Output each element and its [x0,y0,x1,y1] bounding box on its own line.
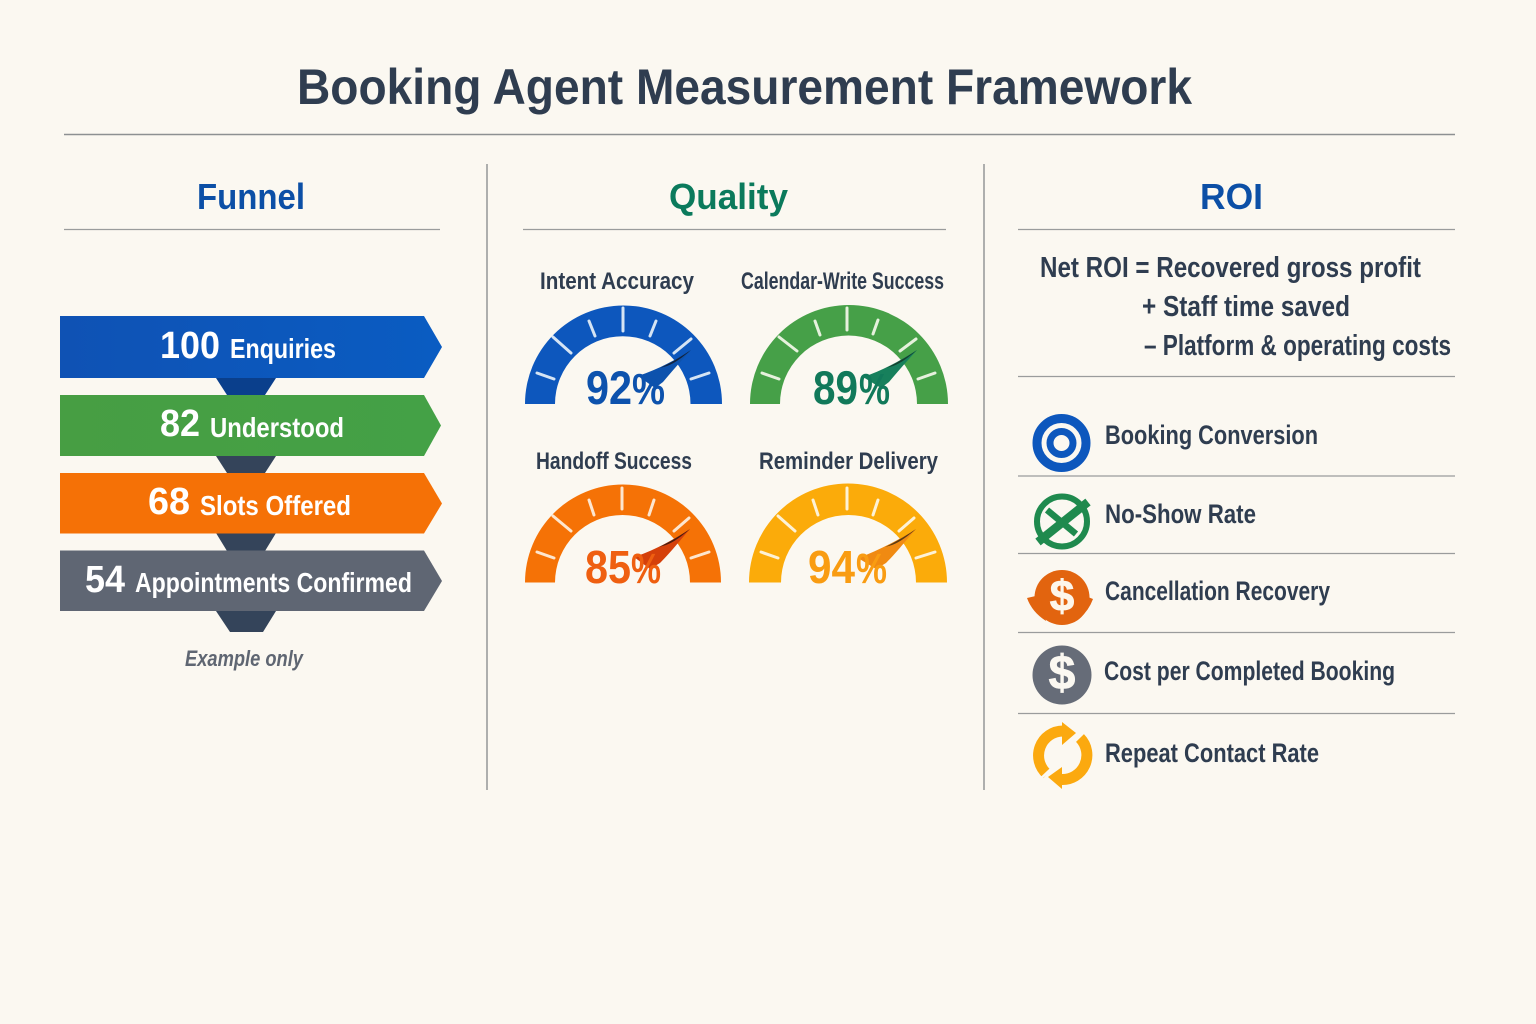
funnel bar: 100 enquiries [60,316,442,378]
connector: understood to slots [216,456,276,473]
gauge: reminder delivery: 94 [808,541,855,593]
gauge: calendar-write success: % [859,365,890,414]
panel: funnel [60,176,442,671]
gauge: intent accuracy [525,268,722,414]
metric: cancellation recovery [1027,570,1330,625]
funnel bar: 54 appointments confirmed: Appointments Confirmed [135,567,412,598]
connector: enquiries to understood [216,378,276,395]
gauge: handoff success: Handoff Success [536,448,692,475]
funnel bar: 68 slots offered: Slots Offered [200,490,351,521]
metric: repeat contact rate: Repeat Contact Rate [1105,738,1319,768]
funnel bar: 68 slots offered: 68 [148,481,190,523]
metric: no-show rate [1037,496,1256,546]
gauge: reminder delivery: Reminder Delivery [759,448,939,475]
roi formula: – Platform & operating costs [1144,330,1451,362]
funnel bar: 100 enquiries: 100 [160,325,220,367]
metric: cost per completed booking [1032,646,1395,704]
metric: cancellation recovery: Cancellation Recovery [1105,576,1330,606]
connector: funnel end [216,611,276,632]
metric: booking conversion [1037,418,1318,468]
gauge: reminder delivery [749,448,947,593]
gauge: calendar-write success: 89 [813,361,858,414]
funnel heading: Funnel [197,176,305,217]
funnel bar: 82 understood: Understood [210,412,344,443]
gauge: intent accuracy: % [632,365,665,414]
funnel bar: 100 enquiries: Enquiries [230,333,336,364]
metric: cancellation recovery: $ [1050,572,1074,621]
metric: cost per completed booking: Cost per Completed Booking [1104,656,1395,686]
metric: no-show rate: No-Show Rate [1105,499,1256,529]
funnel bar: 68 slots offered [60,473,442,534]
connector: slots to confirmed [216,533,276,551]
gauge: handoff success: % [631,545,661,593]
gauge: calendar-write success: Calendar-Write Success [741,268,944,295]
metric: cost per completed booking: $ [1049,647,1076,700]
gauge: reminder delivery: % [856,545,887,593]
funnel bar: 54 appointments confirmed: 54 [85,559,125,601]
funnel bar: 82 understood: 82 [160,403,200,445]
gauge: handoff success [525,448,721,593]
roi formula: + Staff time saved [1142,291,1350,323]
gauge: handoff success: 85 [585,541,631,593]
roi formula: Net ROI = Recovered gross profit [1040,252,1421,284]
gauge: intent accuracy: 92 [586,361,632,414]
funnel bar: 82 understood [60,395,441,456]
roi heading: ROI [1200,176,1263,217]
funnel note: Example only [185,646,304,671]
funnel bar: 54 appointments confirmed [60,550,442,611]
title: Booking Agent Measurement Framework [297,59,1192,115]
quality heading: Quality [669,176,788,217]
panel: quality [523,176,948,593]
metric: repeat contact rate [1036,722,1319,789]
metric: booking conversion: Booking Conversion [1105,420,1318,450]
panel: roi [1018,176,1455,789]
gauge: intent accuracy: Intent Accuracy [540,268,695,295]
gauge: calendar-write success [741,268,948,414]
roi formula [1040,252,1451,362]
